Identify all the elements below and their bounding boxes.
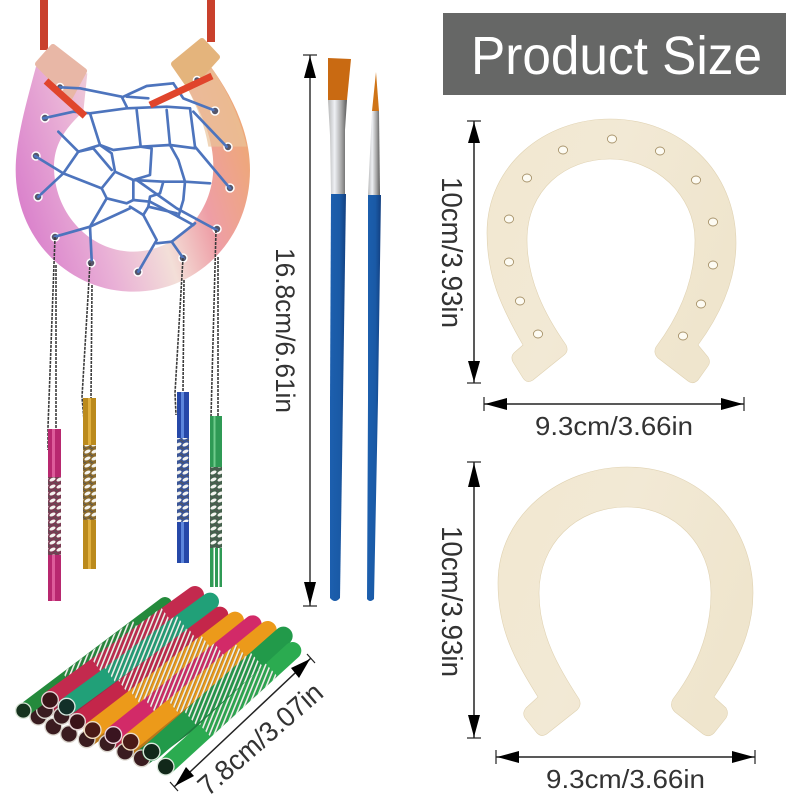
arrow: upper horseshoe height — [467, 121, 481, 383]
hanging strings — [48, 230, 218, 450]
red hanging ribbons — [40, 0, 215, 50]
lower layer tube bodies — [45, 610, 275, 758]
panel: painted dream catcher ornament — [16, 0, 250, 601]
tube openings in the lower layer — [30, 702, 150, 767]
painted horseshoe — [16, 63, 250, 292]
label: lower horseshoe width: 9.3cm/3.66in — [546, 764, 705, 794]
drilled holes — [504, 135, 718, 340]
arrow: brush length dimension — [303, 55, 317, 606]
label: upper horseshoe width: 9.3cm/3.66in — [535, 411, 693, 441]
blue woven net — [35, 83, 230, 272]
blue hanging tube — [177, 392, 189, 563]
right wooden tab — [174, 41, 217, 87]
pink tube 6 — [105, 624, 253, 743]
orange tube 7 — [122, 630, 268, 750]
green hanging tube — [210, 416, 222, 587]
red ribbon ties — [46, 76, 212, 116]
pink hanging tube — [48, 429, 61, 601]
flat brush bristles — [328, 58, 351, 100]
label: lower horseshoe height: 10cm/3.93in — [435, 526, 467, 677]
red tube 4 — [69, 615, 220, 730]
panel: plain wooden horseshoe — [498, 467, 753, 736]
green tube 8 — [143, 636, 283, 760]
panel: pile of metal tubes — [16, 595, 293, 775]
round brush bristles — [372, 72, 379, 111]
arrow: upper horseshoe width — [484, 397, 744, 411]
gold hanging tube — [83, 398, 96, 569]
arrow: tube length dimension — [170, 654, 315, 791]
panel: wooden horseshoe with holes — [487, 119, 736, 383]
heading: Product Size — [443, 13, 786, 95]
heading: Product Size: Product Size — [471, 26, 762, 86]
left wooden tab — [38, 47, 84, 97]
green tube 9 — [157, 651, 293, 775]
lacing holes — [32, 76, 234, 276]
icon: two paint brushes — [328, 58, 381, 601]
round brush handle — [367, 195, 381, 601]
label: brush length: 16.8cm/6.61in — [270, 248, 300, 413]
orange tube 5 — [84, 621, 235, 738]
flat brush ferrule — [328, 100, 347, 194]
label: tube length: 7.8cm/3.07in — [192, 676, 329, 800]
red tube 2 — [42, 595, 195, 708]
green tube 1 — [16, 604, 165, 718]
round brush ferrule — [368, 111, 380, 195]
label: upper horseshoe height: 10cm/3.93in — [435, 177, 467, 328]
flat brush handle — [330, 194, 346, 601]
arrow: lower horseshoe height — [467, 462, 481, 738]
teal tube 3 — [58, 602, 210, 715]
arrow: lower horseshoe width — [496, 750, 755, 764]
